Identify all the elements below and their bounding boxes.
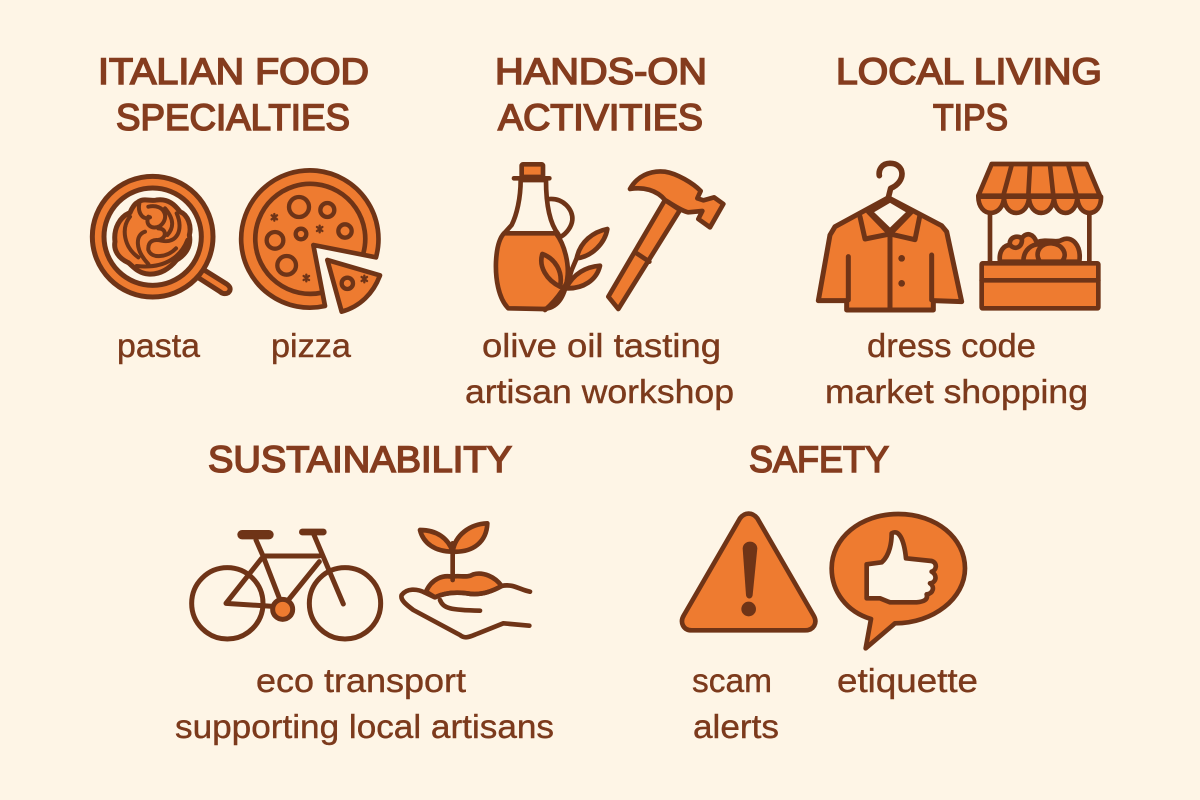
label: scam alerts bbox=[692, 662, 779, 745]
icon: pasta plate bbox=[92, 176, 230, 297]
icon: warning triangle bbox=[682, 514, 815, 630]
icon: shirt on hanger bbox=[818, 163, 962, 310]
label: olive oil tasting: olive oil tasting bbox=[482, 327, 721, 364]
icon: hammer bbox=[608, 171, 723, 309]
heading: hands-on activities bbox=[495, 50, 707, 138]
heading: Italian food specialties: SPECIALTIES bbox=[116, 96, 350, 138]
heading: local living tips bbox=[836, 50, 1102, 138]
heading: Italian food specialties bbox=[98, 50, 369, 138]
heading: hands-on activities: HANDS-ON bbox=[495, 50, 707, 92]
label: dress code: dress code bbox=[867, 327, 1036, 364]
label: scam alerts: scam bbox=[692, 662, 772, 699]
label: pizza: pizza bbox=[271, 327, 352, 364]
icon: thumbs-up speech bubble bbox=[832, 514, 965, 648]
icon: bicycle bbox=[192, 532, 381, 639]
icon: pizza with slice bbox=[241, 170, 380, 312]
heading: sustainability: SUSTAINABILITY bbox=[208, 438, 512, 480]
heading: hands-on activities: ACTIVITIES bbox=[498, 96, 703, 138]
icon: hand holding sprout bbox=[401, 523, 530, 637]
panel: local living tips bbox=[818, 50, 1102, 410]
panel: safety bbox=[682, 438, 978, 745]
label: scam alerts: alerts bbox=[693, 708, 779, 745]
label: etiquette: etiquette bbox=[837, 662, 978, 699]
label: market shopping: market shopping bbox=[825, 373, 1088, 410]
icon: olive oil bottle with leaves bbox=[496, 164, 607, 310]
label: eco transport: eco transport bbox=[256, 662, 466, 699]
label: pasta: pasta bbox=[117, 327, 201, 364]
heading: local living tips: LOCAL LIVING bbox=[836, 50, 1102, 92]
panel: hands-on activities bbox=[465, 50, 734, 410]
panel: sustainability bbox=[175, 438, 554, 745]
heading: Italian food specialties: ITALIAN FOOD bbox=[98, 50, 369, 92]
label: artisan workshop: artisan workshop bbox=[465, 373, 734, 410]
heading: local living tips: TIPS bbox=[933, 96, 1008, 138]
label: supporting local artisans: supporting local artisans bbox=[175, 708, 554, 745]
panel: Italian food specialties bbox=[92, 50, 380, 364]
icon: market stall bbox=[978, 164, 1101, 308]
heading: safety: SAFETY bbox=[749, 438, 889, 480]
